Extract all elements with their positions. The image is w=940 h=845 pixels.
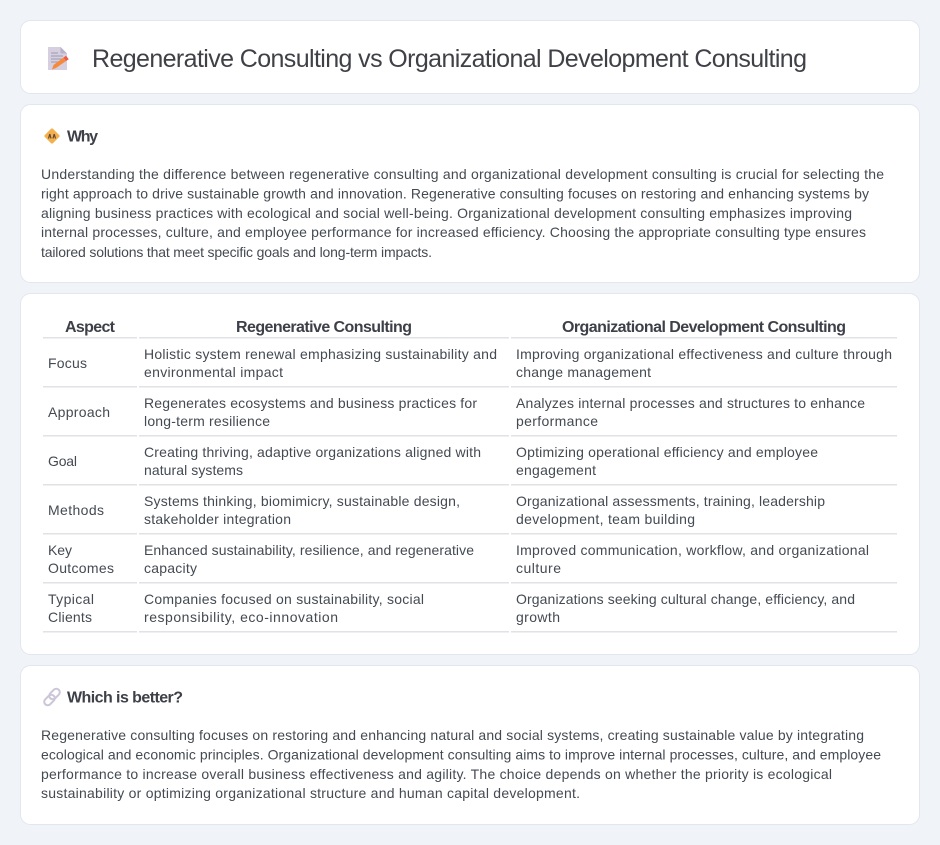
row: approach: Regenerates ecosystems and business practices for bbox=[144, 395, 477, 411]
row: key outcomes: Improved communication, workflow, and organizational bbox=[516, 542, 869, 558]
row: typical clients bbox=[43, 591, 897, 632]
row: key outcomes bbox=[43, 542, 897, 584]
table header: Regenerative Consulting bbox=[236, 319, 412, 336]
row: key outcomes: Outcomes bbox=[48, 560, 114, 576]
text block: which is better paragraph: sustainability or optimizing organizational structure and human capital development. bbox=[41, 785, 580, 801]
row: typical clients: Organizations seeking cultural change, efficiency, and bbox=[516, 591, 855, 607]
icon: diamond sign bbox=[44, 128, 60, 144]
text block: which is better paragraph: performance to increase overall business effectiveness and agility. The choice depends on whether the priority is ecological bbox=[41, 766, 832, 782]
row: methods: Organizational assessments, training, leadership bbox=[516, 493, 825, 509]
row: approach bbox=[43, 395, 897, 436]
title: Regenerative Consulting vs Organizational Development Consulting bbox=[92, 45, 807, 73]
row: methods: Methods bbox=[48, 502, 104, 518]
row: approach: performance bbox=[516, 413, 598, 429]
row: typical clients: growth bbox=[516, 609, 560, 625]
text block: why paragraph: internal processes, culture, and employee performance for increased efficiency. Choosing the appropriate consulting type ensures bbox=[41, 224, 866, 240]
row: focus: Focus bbox=[48, 355, 87, 371]
row: focus: change management bbox=[516, 364, 651, 380]
row: key outcomes: Enhanced sustainability, resilience, and regenerative bbox=[144, 542, 474, 558]
row: typical clients: Typical bbox=[48, 591, 94, 607]
text block: why paragraph: right approach to drive sustainable growth and innovation. Regenerative consulting focuses on restoring and enhancing systems by bbox=[41, 186, 869, 202]
row: typical clients: Companies focused on sustainability, social bbox=[144, 591, 424, 607]
row: typical clients: Clients bbox=[48, 609, 92, 625]
row: methods: stakeholder integration bbox=[144, 511, 291, 527]
row: approach: Approach bbox=[48, 404, 110, 420]
text block: which is better paragraph: Regenerative consulting focuses on restoring and enhancing natural and social systems, creating sustainable value by integrating bbox=[41, 727, 864, 743]
row: key outcomes: culture bbox=[516, 560, 561, 576]
row: focus: Improving organizational effectiveness and culture through bbox=[516, 346, 892, 362]
heading: which is better: Which is better? bbox=[67, 690, 183, 706]
row: methods: Systems thinking, biomimicry, sustainable design, bbox=[144, 493, 460, 509]
text block: why paragraph: tailored solutions that meet specific goals and long-term impacts. bbox=[41, 244, 432, 260]
row: goal: natural systems bbox=[144, 462, 243, 478]
row: methods: development, team building bbox=[516, 511, 695, 527]
text block: why paragraph: Understanding the difference between regenerative consulting and organizational development consulting is crucial for selecting the bbox=[41, 166, 884, 182]
panel: header bbox=[20, 20, 920, 94]
text block: why paragraph bbox=[41, 166, 884, 260]
icon: chain link bbox=[43, 687, 61, 707]
panel: comparison table bbox=[20, 294, 920, 654]
row: goal: Creating thriving, adaptive organizations aligned with bbox=[144, 444, 481, 460]
row: goal: Optimizing operational efficiency and employee bbox=[516, 444, 818, 460]
table header: Aspect bbox=[65, 319, 116, 336]
panel: which is better bbox=[20, 666, 920, 824]
table header: Organizational Development Consulting bbox=[562, 319, 846, 336]
row: approach: Analyzes internal processes and structures to enhance bbox=[516, 395, 865, 411]
row: focus: Holistic system renewal emphasizing sustainability and bbox=[144, 346, 497, 362]
text block: why paragraph: aligning business practices with ecological and social well-being. Organizational development consulting emphasizes improving bbox=[41, 205, 852, 221]
row: key outcomes: Key bbox=[48, 542, 72, 558]
text block: which is better paragraph bbox=[41, 727, 881, 801]
heading: why: Why bbox=[67, 128, 98, 146]
row: focus: environmental impact bbox=[144, 364, 283, 380]
table header bbox=[43, 319, 897, 338]
row: typical clients: responsibility, eco-innovation bbox=[144, 609, 338, 625]
row: focus bbox=[43, 346, 897, 388]
text block: which is better paragraph: ecological and economic principles. Organizational development consulting aims to improve internal processes, culture, and employee bbox=[41, 746, 881, 762]
row: goal: engagement bbox=[516, 462, 596, 478]
row: methods bbox=[43, 493, 897, 534]
icon: document with pencil bbox=[48, 47, 69, 70]
row: goal bbox=[43, 444, 897, 486]
row: approach: long-term resilience bbox=[144, 413, 270, 429]
panel: why bbox=[20, 104, 920, 282]
row: key outcomes: capacity bbox=[144, 560, 197, 576]
row: goal: Goal bbox=[48, 453, 77, 469]
